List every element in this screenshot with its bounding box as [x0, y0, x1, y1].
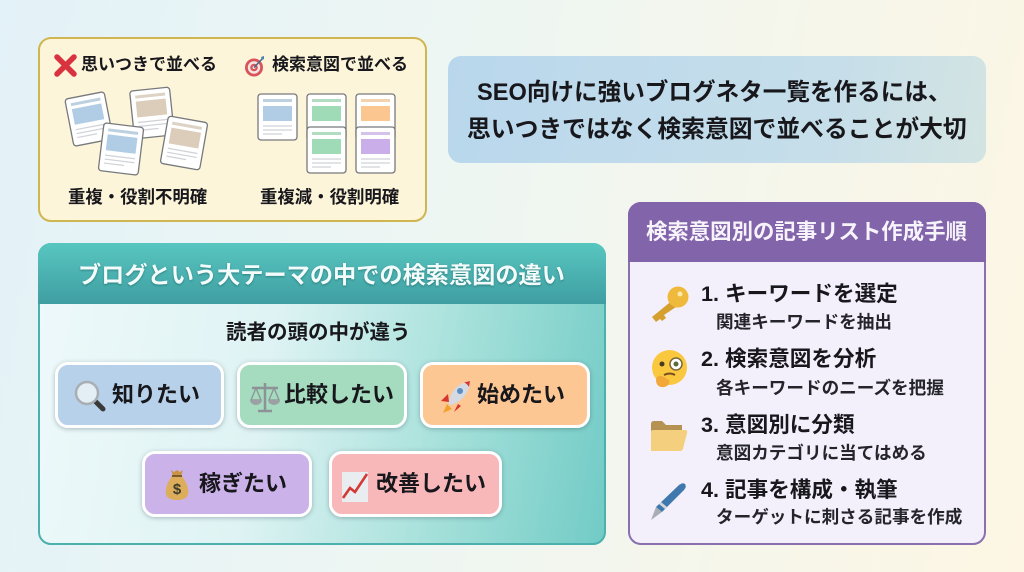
panel: main title — [448, 56, 986, 163]
pill: want to earn — [142, 451, 312, 517]
panel: comparison of arrangement — [38, 37, 427, 222]
pill: want to start: 始めたい — [477, 382, 565, 407]
diagram: ordered article cards — [257, 93, 396, 174]
step 1 title: 1. キーワードを選定 — [701, 281, 898, 306]
icon: balance scale — [250, 383, 280, 412]
panel: search intent differences — [38, 243, 606, 545]
panel header: teal — [38, 243, 606, 304]
step 3 description: 意図カテゴリに当てはめる — [716, 443, 927, 463]
step 3 title: 3. 意図別に分類 — [701, 412, 855, 437]
icon: target — [245, 56, 264, 76]
pill: want to know: 知りたい — [112, 382, 200, 407]
icon: folder — [651, 421, 688, 451]
icon: money bag: $ — [173, 481, 182, 498]
pill: want to know — [55, 362, 224, 428]
pill: want to improve — [329, 451, 502, 517]
subheading: readers differ: 読者の頭の中が違う — [226, 321, 410, 344]
panel header: purple — [628, 202, 986, 262]
heading: arranging by whim: 思いつきで並べる — [81, 55, 217, 74]
pill: want to start — [420, 362, 590, 428]
step 4 title: 4. 記事を構成・執筆 — [701, 477, 898, 502]
step 1 description: 関連キーワードを抽出 — [716, 312, 892, 332]
pill: want to compare — [237, 362, 407, 428]
icon: thinking face — [652, 350, 687, 388]
title: line 1: SEO向けに強いブログネタ一覧を作るには、 — [477, 80, 952, 106]
heading: arranging by search intent: 検索意図で並べる — [272, 55, 408, 74]
panel: procedure — [628, 202, 986, 545]
icon: pen — [651, 483, 686, 520]
icon: rocket — [441, 381, 470, 413]
step 4 description: ターゲットに刺さる記事を作成 — [716, 507, 962, 527]
pill: want to earn: 稼ぎたい — [199, 471, 287, 496]
heading: procedure: 検索意図別の記事リスト作成手順 — [646, 220, 967, 244]
pill: want to compare: 比較したい — [284, 382, 394, 407]
icon: red cross — [54, 54, 77, 77]
diagram: scattered article cards — [64, 86, 208, 176]
heading: search intent differences: ブログという大テーマの中での検索意図の違い — [78, 262, 565, 288]
icon: key — [652, 286, 688, 322]
icon: chart increasing — [342, 472, 368, 502]
title: line 2: 思いつきではなく検索意図で並べることが大切 — [467, 116, 967, 143]
step 2 description: 各キーワードのニーズを把握 — [716, 378, 944, 398]
icon: money bag — [166, 470, 188, 500]
caption: overlapping roles: 重複・役割不明確 — [68, 187, 207, 207]
pill: want to improve: 改善したい — [376, 471, 486, 496]
icon: magnifying glass — [74, 380, 106, 412]
step 2 title: 2. 検索意図を分析 — [701, 346, 876, 371]
caption: clear roles: 重複減・役割明確 — [260, 187, 399, 207]
